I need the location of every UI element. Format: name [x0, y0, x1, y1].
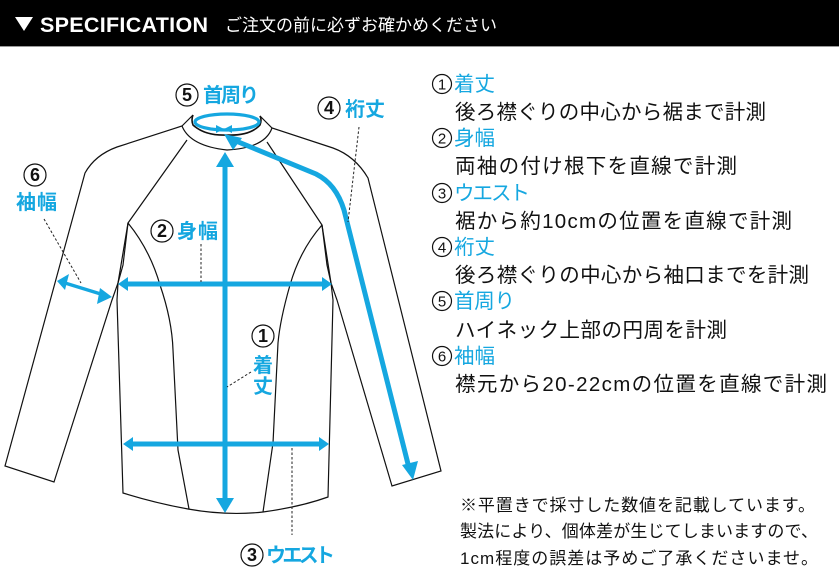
item 2: 両袖の付け根下を直線で計測	[455, 155, 737, 178]
label 1: body length	[252, 325, 274, 398]
label 5: neck: 首周り	[203, 84, 259, 107]
item 3: ウエスト	[454, 182, 530, 205]
item 2: 身幅	[454, 127, 495, 150]
arrow: sleeve length	[224, 134, 418, 480]
label 3: waist: ウエスト	[266, 544, 335, 567]
item 5	[432, 290, 727, 342]
item 4	[432, 236, 809, 287]
label 5: neck: 5	[182, 85, 192, 105]
item 2: 2	[438, 130, 446, 148]
garment diagram	[5, 84, 441, 567]
label 4: sleeve length: 4	[324, 98, 334, 118]
item 1: 着丈	[454, 73, 495, 96]
footnote	[460, 496, 818, 568]
item 6: 袖幅	[454, 345, 495, 368]
label 1: body length: 1	[258, 326, 268, 346]
label 2: chest width: 2	[157, 221, 167, 241]
item 4: 後ろ襟ぐりの中心から袖口までを計測	[455, 264, 809, 287]
footnote: 1cm程度の誤差は予めご了承くださいませ。	[460, 549, 818, 568]
footnote: ※平置きで採寸した数値を記載しています。	[460, 496, 815, 515]
item 3	[432, 182, 792, 233]
item 6: 襟元から20-22cmの位置を直線で計測	[455, 373, 827, 396]
item 5: 5	[438, 294, 446, 310]
label 2: chest width	[151, 220, 218, 243]
header bar	[0, 0, 839, 47]
item 1: 後ろ襟ぐりの中心から裾まで計測	[455, 101, 766, 124]
label 4: sleeve length: 裄丈	[345, 98, 385, 121]
label 3: waist: 3	[247, 545, 257, 565]
arrow: body length	[216, 152, 234, 513]
item 2	[432, 127, 737, 178]
label 6: sleeve width: 6	[30, 165, 40, 185]
neck circumference loop	[195, 114, 259, 133]
item 4: 4	[438, 240, 446, 256]
arrow: waist	[123, 437, 329, 451]
item 3: 3	[438, 186, 446, 202]
icon: header triangle	[15, 17, 33, 31]
item 6	[432, 345, 827, 396]
arrow: chest width	[118, 277, 332, 291]
label 5: neck	[176, 84, 259, 107]
item 4: 裄丈	[454, 236, 495, 259]
leader lines	[44, 127, 359, 535]
item 1: 1	[438, 76, 446, 94]
item 5: ハイネック上部の円周を計測	[455, 319, 727, 342]
measurement list	[432, 73, 827, 396]
label 1: body length: 丈	[253, 375, 273, 398]
label 1: body length: 着	[253, 354, 273, 377]
heading: SPECIFICATION: SPECIFICATION	[40, 13, 208, 37]
item 1	[432, 73, 766, 124]
item 6: 6	[438, 348, 446, 366]
label 2: chest width: 身幅	[177, 220, 218, 243]
label 6: sleeve width	[16, 164, 57, 214]
arrow: sleeve width	[57, 274, 112, 304]
footnote: 製法により、個体差が生じてしまいますので、	[460, 522, 818, 541]
label 6: sleeve width: 袖幅	[16, 191, 57, 214]
subheading: ご注文の前に必ずお確かめください	[225, 16, 497, 35]
item 3: 裾から約10cmの位置を直線で計測	[455, 210, 792, 233]
item 5: 首周り	[454, 290, 515, 313]
garment outline	[5, 115, 441, 513]
label 4: sleeve length	[318, 97, 385, 121]
